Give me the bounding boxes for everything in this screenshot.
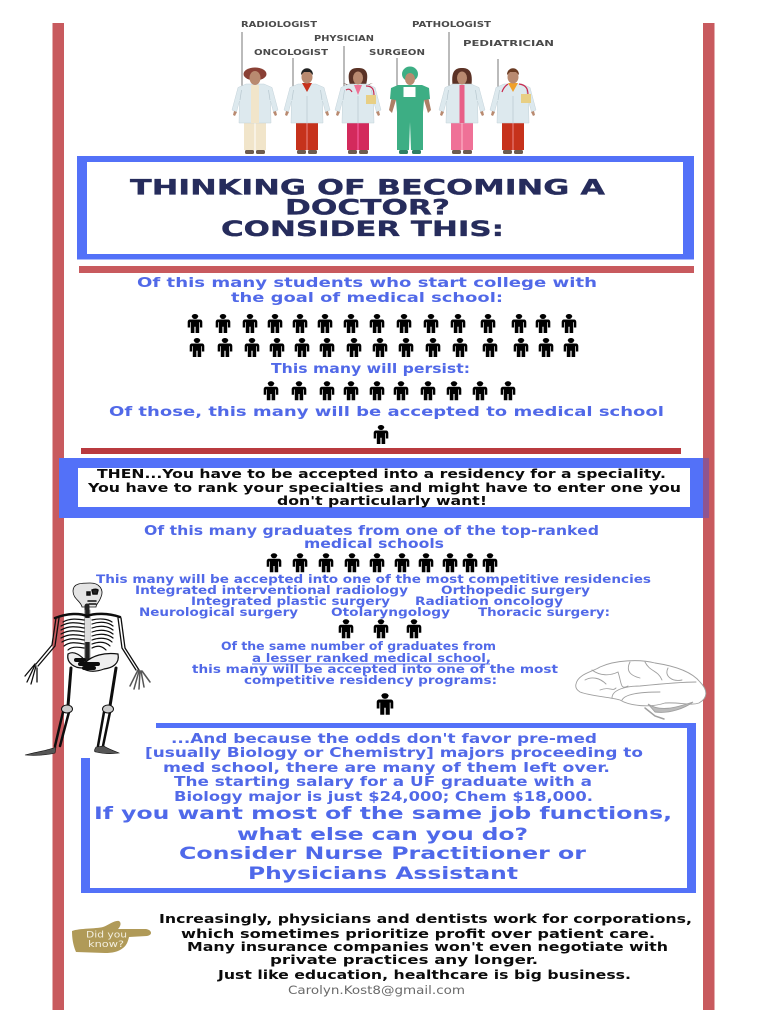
icon: skeleton xyxy=(25,583,150,755)
title text: THINKING OF BECOMING A xyxy=(130,176,606,200)
text: pre-med odds: Biology major is just $24,000; Chem $18,000. xyxy=(174,790,593,805)
text: competitive residencies list: Thoracic surgery: xyxy=(478,605,610,619)
pictogram: students persisting xyxy=(264,381,515,400)
text: top-ranked graduates: Of this many graduates from one of the top-ranked xyxy=(144,524,599,539)
title text: DOCTOR? xyxy=(285,196,450,220)
icon: pointing hand with did you know: know? xyxy=(88,940,124,950)
text: what else can you do: what else can you do? xyxy=(237,825,528,844)
figure: surgeon xyxy=(389,66,431,154)
red divider under title xyxy=(79,266,694,273)
text: competitive residencies list: Neurological surgery xyxy=(139,605,299,619)
icon: pointing hand with did you know xyxy=(72,921,151,953)
intro text: students: the goal of medical school: xyxy=(231,291,503,306)
text: what else can you do: Consider Nurse Practitioner or xyxy=(179,844,587,863)
text: what else can you do: If you want most of the same job functions, xyxy=(94,804,672,823)
closing text: healthcare business: which sometimes prioritize profit over patient care. xyxy=(181,926,655,941)
figure: pathologist xyxy=(439,68,485,154)
doctor role labels: SURGEON xyxy=(369,48,425,57)
intro text: students: Of this many students who start college with xyxy=(137,276,597,291)
closing text: healthcare business: Just like education, healthcare is big business. xyxy=(217,967,631,982)
contact email: Carolyn.Kost8@gmail.com xyxy=(288,983,465,997)
pictogram: one student accepted xyxy=(374,425,388,444)
text: lesser ranked school: a lesser ranked medical school, xyxy=(252,651,491,665)
text: pre-med odds xyxy=(145,732,643,805)
callout text: You have to rank your specialties and might have to enter one you xyxy=(87,480,681,495)
text: persist: This many will persist: xyxy=(271,362,470,377)
alternatives panel xyxy=(81,723,696,893)
text: competitive residencies list: Integrated interventional radiology xyxy=(135,583,409,597)
intro text: students xyxy=(137,276,597,306)
text: top-ranked graduates xyxy=(144,524,599,552)
text: lesser ranked school: Of the same number of graduates from xyxy=(221,639,496,653)
doctor role labels: ONCOLOGIST xyxy=(254,48,329,57)
pictogram: top-ranked graduates xyxy=(267,553,497,572)
dark red divider xyxy=(81,448,681,454)
title text: CONSIDER THIS: xyxy=(221,217,504,242)
text: pre-med odds: ...And because the odds don't favor pre-med xyxy=(171,732,597,747)
callout text: don't particularly want! xyxy=(277,493,487,508)
text: competitive residencies list: Otolaryngology xyxy=(331,605,451,619)
closing text: healthcare business: Many insurance companies won't even negotiate with xyxy=(187,939,668,954)
text: lesser ranked school xyxy=(192,639,559,687)
doctor role labels: PHYSICIAN xyxy=(314,34,374,43)
pictogram: one lesser-ranked graduate xyxy=(377,693,393,715)
figure: radiologist xyxy=(232,68,278,154)
doctors illustration xyxy=(232,20,554,154)
text: lesser ranked school: this many will be accepted into one of the most xyxy=(192,662,559,676)
doctor role labels: RADIOLOGIST xyxy=(241,20,318,29)
text: what else can you do xyxy=(94,804,672,883)
figure: oncologist xyxy=(284,68,330,154)
right side bar xyxy=(703,23,714,1010)
figure: pediatrician xyxy=(490,68,536,154)
icon: brain xyxy=(576,661,706,719)
text: accepted to medical school: Of those, this many will be accepted to medical school xyxy=(109,405,664,420)
text: competitive residencies list: Radiation oncology xyxy=(415,594,564,608)
title text xyxy=(130,176,606,242)
text: lesser ranked school: competitive residency programs: xyxy=(244,673,497,687)
doctor role labels: PATHOLOGIST xyxy=(412,20,492,29)
residency callout panel xyxy=(59,458,709,518)
callout text xyxy=(87,466,681,508)
icon: pointing hand with did you know: Did you xyxy=(86,930,127,940)
callout text: THEN...You have to be accepted into a residency for a speciality. xyxy=(97,466,666,481)
left side bar xyxy=(52,23,64,1010)
figure: physician xyxy=(335,68,381,154)
text: competitive residencies list: Orthopedic surgery xyxy=(441,583,591,597)
text: pre-med odds: The starting salary for a UF graduate with a xyxy=(174,775,592,790)
title panel xyxy=(77,156,694,260)
text: competitive residencies list xyxy=(96,572,651,619)
closing text: healthcare business xyxy=(159,911,692,982)
leader lines xyxy=(241,32,499,89)
pictogram: competitive residency matches xyxy=(339,619,421,638)
pictogram: students starting xyxy=(188,314,578,357)
closing text: healthcare business: private practices any longer. xyxy=(270,952,538,967)
text: what else can you do: Physicians Assistant xyxy=(248,864,518,883)
text: pre-med odds: med school, there are many of them left over. xyxy=(163,761,610,776)
doctor role labels xyxy=(241,20,554,57)
text: top-ranked graduates: medical schools xyxy=(304,537,444,552)
doctor role labels: PEDIATRICIAN xyxy=(463,39,554,48)
text: competitive residencies list: This many will be accepted into one of the most competitive residencies xyxy=(96,572,651,586)
closing text: healthcare business: Increasingly, physicians and dentists work for corporations, xyxy=(159,911,692,926)
text: competitive residencies list: Integrated plastic surgery xyxy=(191,594,391,608)
text: pre-med odds: [usually Biology or Chemistry] majors proceeding to xyxy=(145,746,643,761)
